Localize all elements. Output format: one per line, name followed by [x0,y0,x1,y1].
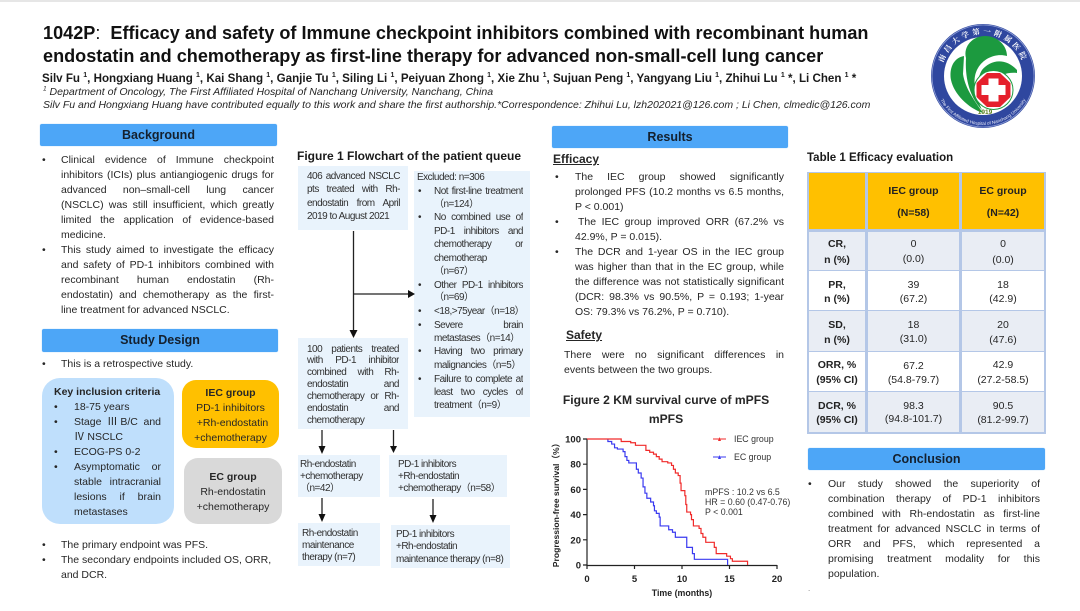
panel: efficacy text: was higher than that in the EC group, while [575,261,784,273]
row: PR: 39 [908,279,919,291]
heading: results [552,126,788,148]
statistics annotation [705,487,790,517]
box: EC maintenance [298,523,380,566]
heading: study design [42,329,278,352]
panel: efficacy text: • [555,171,559,183]
panel: efficacy text: prolonged PFS (10.2 months vs 6.5 months, [575,186,784,198]
row: PR [809,271,1044,310]
panel: conclusion text: Our study showed the superiority of [828,478,1040,490]
box: IEC maintenance: maintenance therapy (n=8) [396,554,503,565]
icon: hospital logo: 南昌大学第一附属医院 [938,28,1027,62]
panel: EC group: EC group [209,471,257,483]
box: excluded: • [418,186,421,197]
y tick labels [565,434,581,572]
panel: background text: line treatment for advanced NSCLC. [61,304,230,316]
box: 406 patients [298,166,408,230]
x tick labels: 10 [677,574,687,585]
x axis title: Time (months) [652,588,712,598]
panel: efficacy text [555,171,784,318]
panel: key inclusion criteria: • [54,461,58,473]
panel: efficacy text: OS: 79.3% vs 76.2%, P = 0.710). [575,306,729,318]
row: CR [809,232,1044,270]
panel: background text: medicine. [61,229,106,241]
row: SD: (47.6) [989,334,1017,346]
panel: efficacy text: • [555,246,559,258]
box: excluded: • [418,320,421,331]
panel: efficacy text: the difference was not statistically significant [575,276,784,288]
box: excluded: • [418,306,421,317]
heading: figure 2 [563,393,769,426]
affiliation and correspondence: Silv Fu and Hongxiang Huang have contributed equally to this work and share the first authorship.*Correspondence: Zhihui Lu, lzh202021@126.com ; Li Chen, clmedic@126.com [43,99,870,111]
box: excluded: metastases（n=14） [434,333,520,344]
heading: safety: Safety [566,328,602,342]
row: SD: (31.0) [900,333,927,345]
panel: key inclusion criteria: Key inclusion criteria [54,386,160,398]
panel: IEC group [182,380,279,448]
table: efficacy evaluation [807,172,1046,434]
box: 100 patients: with PD-1 inhibitor [307,355,399,366]
header row: (N=42) [987,207,1019,219]
box: excluded: No combined use of [434,212,523,223]
panel: conclusion text: . [808,584,810,593]
heading: table 1: Table 1 Efficacy evaluation [807,152,953,164]
row: DCR [809,392,1044,432]
panel: key inclusion criteria: 18-75 years [74,401,129,413]
statistics annotation: P < 0.001 [705,507,743,517]
box: excluded: chemotherap [434,253,487,264]
panel: conclusion text [808,478,1040,593]
panel: key inclusion criteria: Stage ⅢB/C and [74,416,161,428]
top edge strip [0,0,1080,2]
text: endpoints: The secondary endpoints included OS, ORR, [61,554,271,566]
panel: background text [42,154,274,316]
panel: efficacy text: P < 0.001) [575,201,624,213]
panel: key inclusion criteria: • [54,401,58,413]
panel: IEC group: +chemotherapy [194,432,267,444]
panel: key inclusion criteria: stable intracranial [74,476,161,488]
box: IEC arm: +chemotherapy（n=58） [398,483,500,494]
affiliation and correspondence: 1 Department of Oncology, The First Affiliated Hospital of Nanchang University, Nanchang, China [43,85,493,98]
box: excluded: Severe brain [434,320,523,331]
box: IEC arm [389,455,507,497]
flow arrows [318,231,436,523]
x tick labels: 15 [724,574,735,585]
y tick labels: 80 [570,460,581,471]
box: excluded: chemotherapy or [434,239,523,250]
legend: EC group [713,452,771,462]
panel: efficacy text: The IEC group improved ORR (67.2% vs [578,216,784,228]
box: excluded: • [418,346,421,357]
title [43,23,868,66]
box: 100 patients: combined with Rh- [307,367,399,378]
panel: background text: Clinical evidence of Immune checkpoint [61,154,274,166]
statistics annotation: mPFS : 10.2 vs 6.5 [705,487,780,497]
panel: efficacy text: (DCR: 98.3% vs 90.5%, P = 0.193; 1-year [575,291,784,303]
box: excluded: Other PD-1 inhibitors [434,280,523,291]
curve: IEC group [587,439,748,565]
heading: results: Results [647,130,693,144]
box: excluded: Excluded: n=306 [417,172,484,183]
panel: efficacy text: The IEC group showed significantly [575,171,784,183]
panel: background text: limited the application of evidence-based [61,214,274,226]
arrow: to IEC maintenance [430,499,436,523]
heading: figure 2: Figure 2 KM survival curve of mPFS [563,393,769,407]
box: excluded [414,171,530,417]
panel: efficacy text: 42.9%, P = 0.015). [575,231,662,243]
arrow: to EC arm [318,430,326,454]
box: excluded: <18,>75year（n=18） [434,306,524,317]
box: excluded: Having two primary [434,346,523,357]
y tick labels: 40 [570,510,581,521]
panel: background text: recombinant human endostatin (Rh- [61,274,274,286]
arrow: to EC maintenance [318,498,326,522]
panel: conclusion text: combined with Rh-endostatin as first-line [828,508,1040,520]
title: 1042P: Efficacy and safety of Immune checkpoint inhibitors combined with recombinant human [43,23,868,43]
row: DCR: 98.3 [903,400,924,412]
icon: hospital logo [931,24,1035,128]
row: ORR: 42.9 [993,359,1013,371]
panel: background text: advanced non–small-cell lung cancer [61,184,274,196]
heading: study design: Study Design [120,333,200,347]
panel: conclusion text: • [808,478,812,490]
panel: IEC group: +Rh-endostatin [197,417,268,429]
panel: IEC group: PD-1 inhibitors [196,402,265,414]
panel: efficacy text: The DCR and 1-year OS in the IEC group [575,246,784,258]
y tick labels: 0 [576,560,581,572]
heading: figure 2: mPFS [649,412,683,426]
row: PR: 18 [997,279,1009,291]
box: IEC maintenance: PD-1 inhibitors [396,529,454,540]
heading: figure 1: Figure 1 Flowchart of the patient queue [297,149,521,163]
text: endpoints: • [42,554,46,566]
x tick labels: 5 [632,574,638,585]
row: CR: 0 [911,238,916,250]
row: CR: 0 [1000,238,1006,250]
box: 406 patients: pts treated with Rh- [307,184,400,195]
y tick labels: 60 [570,485,581,496]
box: IEC arm: +Rh-endostatin [398,471,459,482]
panel: background text: • [42,154,46,166]
box: excluded: least two cycles of [434,387,523,398]
arrow: to excluded [354,290,415,298]
box: excluded: • [418,280,421,291]
box: EC arm: （n=42） [300,483,340,494]
authors: Silv Fu 1, Hongxiang Huang 1, Kai Shang 1, Ganjie Tu 1, Siling Li 1, Peiyuan Zhong 1, Xie Zhu 1, Sujuan Peng 1, Yangyang Liu 1, Zhihui Lu 1 *, Li Chen 1 * [42,72,856,85]
box: excluded: • [418,212,421,223]
panel: conclusion text: promising treatment modality for this [828,553,1040,565]
text: endpoints: The primary endpoint was PFS. [61,539,208,551]
x tick labels: 20 [772,574,782,585]
panel: EC group: Rh-endostatin [200,486,266,498]
box: IEC maintenance [391,525,510,568]
row: DCR: (94.8-101.7) [885,413,942,425]
y axis label: Progression-free survival（%） [551,439,561,567]
box: excluded: （n=124） [434,199,479,210]
curve: EC group [608,439,728,565]
row: DCR: DCR, % [818,400,856,412]
x tick labels: 0 [584,574,590,585]
box: EC maintenance: Rh-endostatin [302,528,358,539]
row: ORR: (95% CI) [816,374,858,386]
affiliation and correspondence [43,85,870,111]
row: ORR: 67.2 [903,360,924,372]
heading: conclusion [808,448,1045,470]
row: PR: (67.2) [900,293,927,305]
panel: conclusion text: combination therapy of PD-1 inhibitors [828,493,1040,505]
panel: conclusion text: treatment for advanced NSCLC in terms of [828,523,1040,535]
panel: key inclusion criteria: Asymptomatic or [74,461,161,473]
statistics annotation: HR = 0.60 (0.47-0.76) [705,497,790,507]
box: EC arm: Rh-endostatin [300,459,356,470]
row: ORR: ORR, % [818,359,856,371]
box: 100 patients: endostatin and [307,403,399,414]
header row [809,173,1044,229]
heading: efficacy: Efficacy [553,152,599,166]
box: excluded: （n=67） [434,266,474,277]
axes and ticks [583,438,777,569]
icon: hospital logo: The First Affiliated Hospital of Nanchang University [940,98,1026,126]
text: study type: This is a retrospective study. [61,358,193,370]
text: study type: • [42,358,46,370]
chart: KM survival curve [551,434,790,598]
legend: IEC group: IEC group [734,434,774,444]
box: 100 patients: chemotherapy or Rh- [307,391,399,402]
panel: IEC group: IEC group [205,387,256,399]
panel: background text: and safety of PD-1 inhibitors combined with [61,259,274,271]
row: SD: 18 [908,319,919,331]
header row: IEC group [888,185,939,197]
panel: conclusion text: population. [828,568,879,580]
panel: EC group [184,458,282,524]
text: safety: events between the two groups. [564,364,712,376]
heading: background [40,124,277,146]
panel: key inclusion criteria: metastases [74,506,128,518]
panel: EC group: +chemotherapy [197,501,269,513]
flowchart [298,166,530,568]
text: endpoints [42,539,271,581]
row: SD: 20 [997,319,1009,331]
row: SD: n (%) [824,334,850,346]
row: ORR: (54.8-79.7) [888,374,939,386]
text: endpoints: • [42,539,46,551]
box: IEC arm: PD-1 inhibitors [398,459,456,470]
box: 406 patients: 2019 to August 2021 [307,211,389,222]
box: EC maintenance: maintenance [302,540,354,551]
box: 406 patients: endostatin from April [307,198,400,209]
row: DCR: 90.5 [993,400,1013,412]
panel: background text: inhibitors (ICIs) plus antiangiogenic drugs for [61,169,274,181]
box: 406 patients: 406 advanced NSCLC [307,171,400,182]
panel: conclusion text: ORR and PFS, which represented a [828,538,1040,550]
text: endpoints: and DCR. [61,569,107,581]
y tick labels: 100 [565,434,581,446]
row: SD: SD, [828,319,846,331]
box: excluded: treatment（n=9） [434,400,506,411]
panel: key inclusion criteria: • [54,416,58,428]
box: excluded: malignancies（n=5） [434,360,521,371]
arrow: to 100 patients [350,231,358,338]
row: SD [809,311,1044,351]
row: PR: PR, [828,279,846,291]
panel: efficacy text: • [555,216,559,228]
panel: background text: (NSCLC) was still insufficient, which greatly [61,199,274,211]
row: PR: n (%) [824,293,850,305]
box: 100 patients [298,338,408,429]
row: DCR: (95% CI) [816,414,858,426]
box: IEC maintenance: +Rh-endostatin [396,541,457,552]
text: safety [564,349,784,376]
box: EC arm [298,455,380,497]
row: ORR [809,352,1044,391]
row: CR: n (%) [824,254,850,266]
y tick labels: 20 [570,535,581,546]
row: ORR: (27.2-58.5) [977,374,1029,386]
panel: key inclusion criteria: • [54,446,58,458]
row: PR: (42.9) [989,293,1017,305]
title: endostatin and chemotherapy as first-line therapy for advanced non-small-cell lung cancer [43,46,823,66]
heading: background: Background [122,128,195,142]
header row: EC group [979,185,1027,197]
box: excluded: （n=69） [434,292,474,303]
header row: (N=58) [897,207,930,219]
row: CR: (0.0) [992,254,1014,266]
row: CR: CR, [828,238,846,250]
row: DCR: (81.2-99.7) [977,414,1029,426]
panel: background text: endostatin) and chemotherapy as the first- [61,289,274,301]
panel: key inclusion criteria: Ⅳ NSCLC [74,431,123,443]
box: 100 patients: 100 patients treated [307,344,399,355]
panel: key inclusion criteria: lesions if brain [74,491,161,503]
icon: hospital logo: 1919 [978,109,993,116]
box: EC arm: +chemotherapy [300,471,363,482]
panel: background text: This study aimed to investigate the efficacy [61,244,274,256]
box: 100 patients: endostatin and [307,379,399,390]
legend: IEC group [713,434,774,444]
x tick labels [584,574,782,585]
legend: EC group: EC group [734,452,771,462]
box: 100 patients: chemotherapy [307,415,364,426]
box: excluded: • [418,374,421,385]
heading: conclusion: Conclusion [892,452,961,466]
panel: key inclusion criteria: ECOG-PS 0-2 [74,446,141,458]
box: excluded: Not first-line treatment [434,186,523,197]
box: excluded: Failure to complete at [434,374,523,385]
panel: background text: • [42,244,46,256]
panel: key inclusion criteria [42,378,174,524]
arrow: to IEC arm [390,430,397,453]
box: excluded: PD-1 inhibitors and [434,226,523,237]
box: EC maintenance: therapy (n=7) [302,552,355,563]
row: CR: (0.0) [903,253,924,265]
